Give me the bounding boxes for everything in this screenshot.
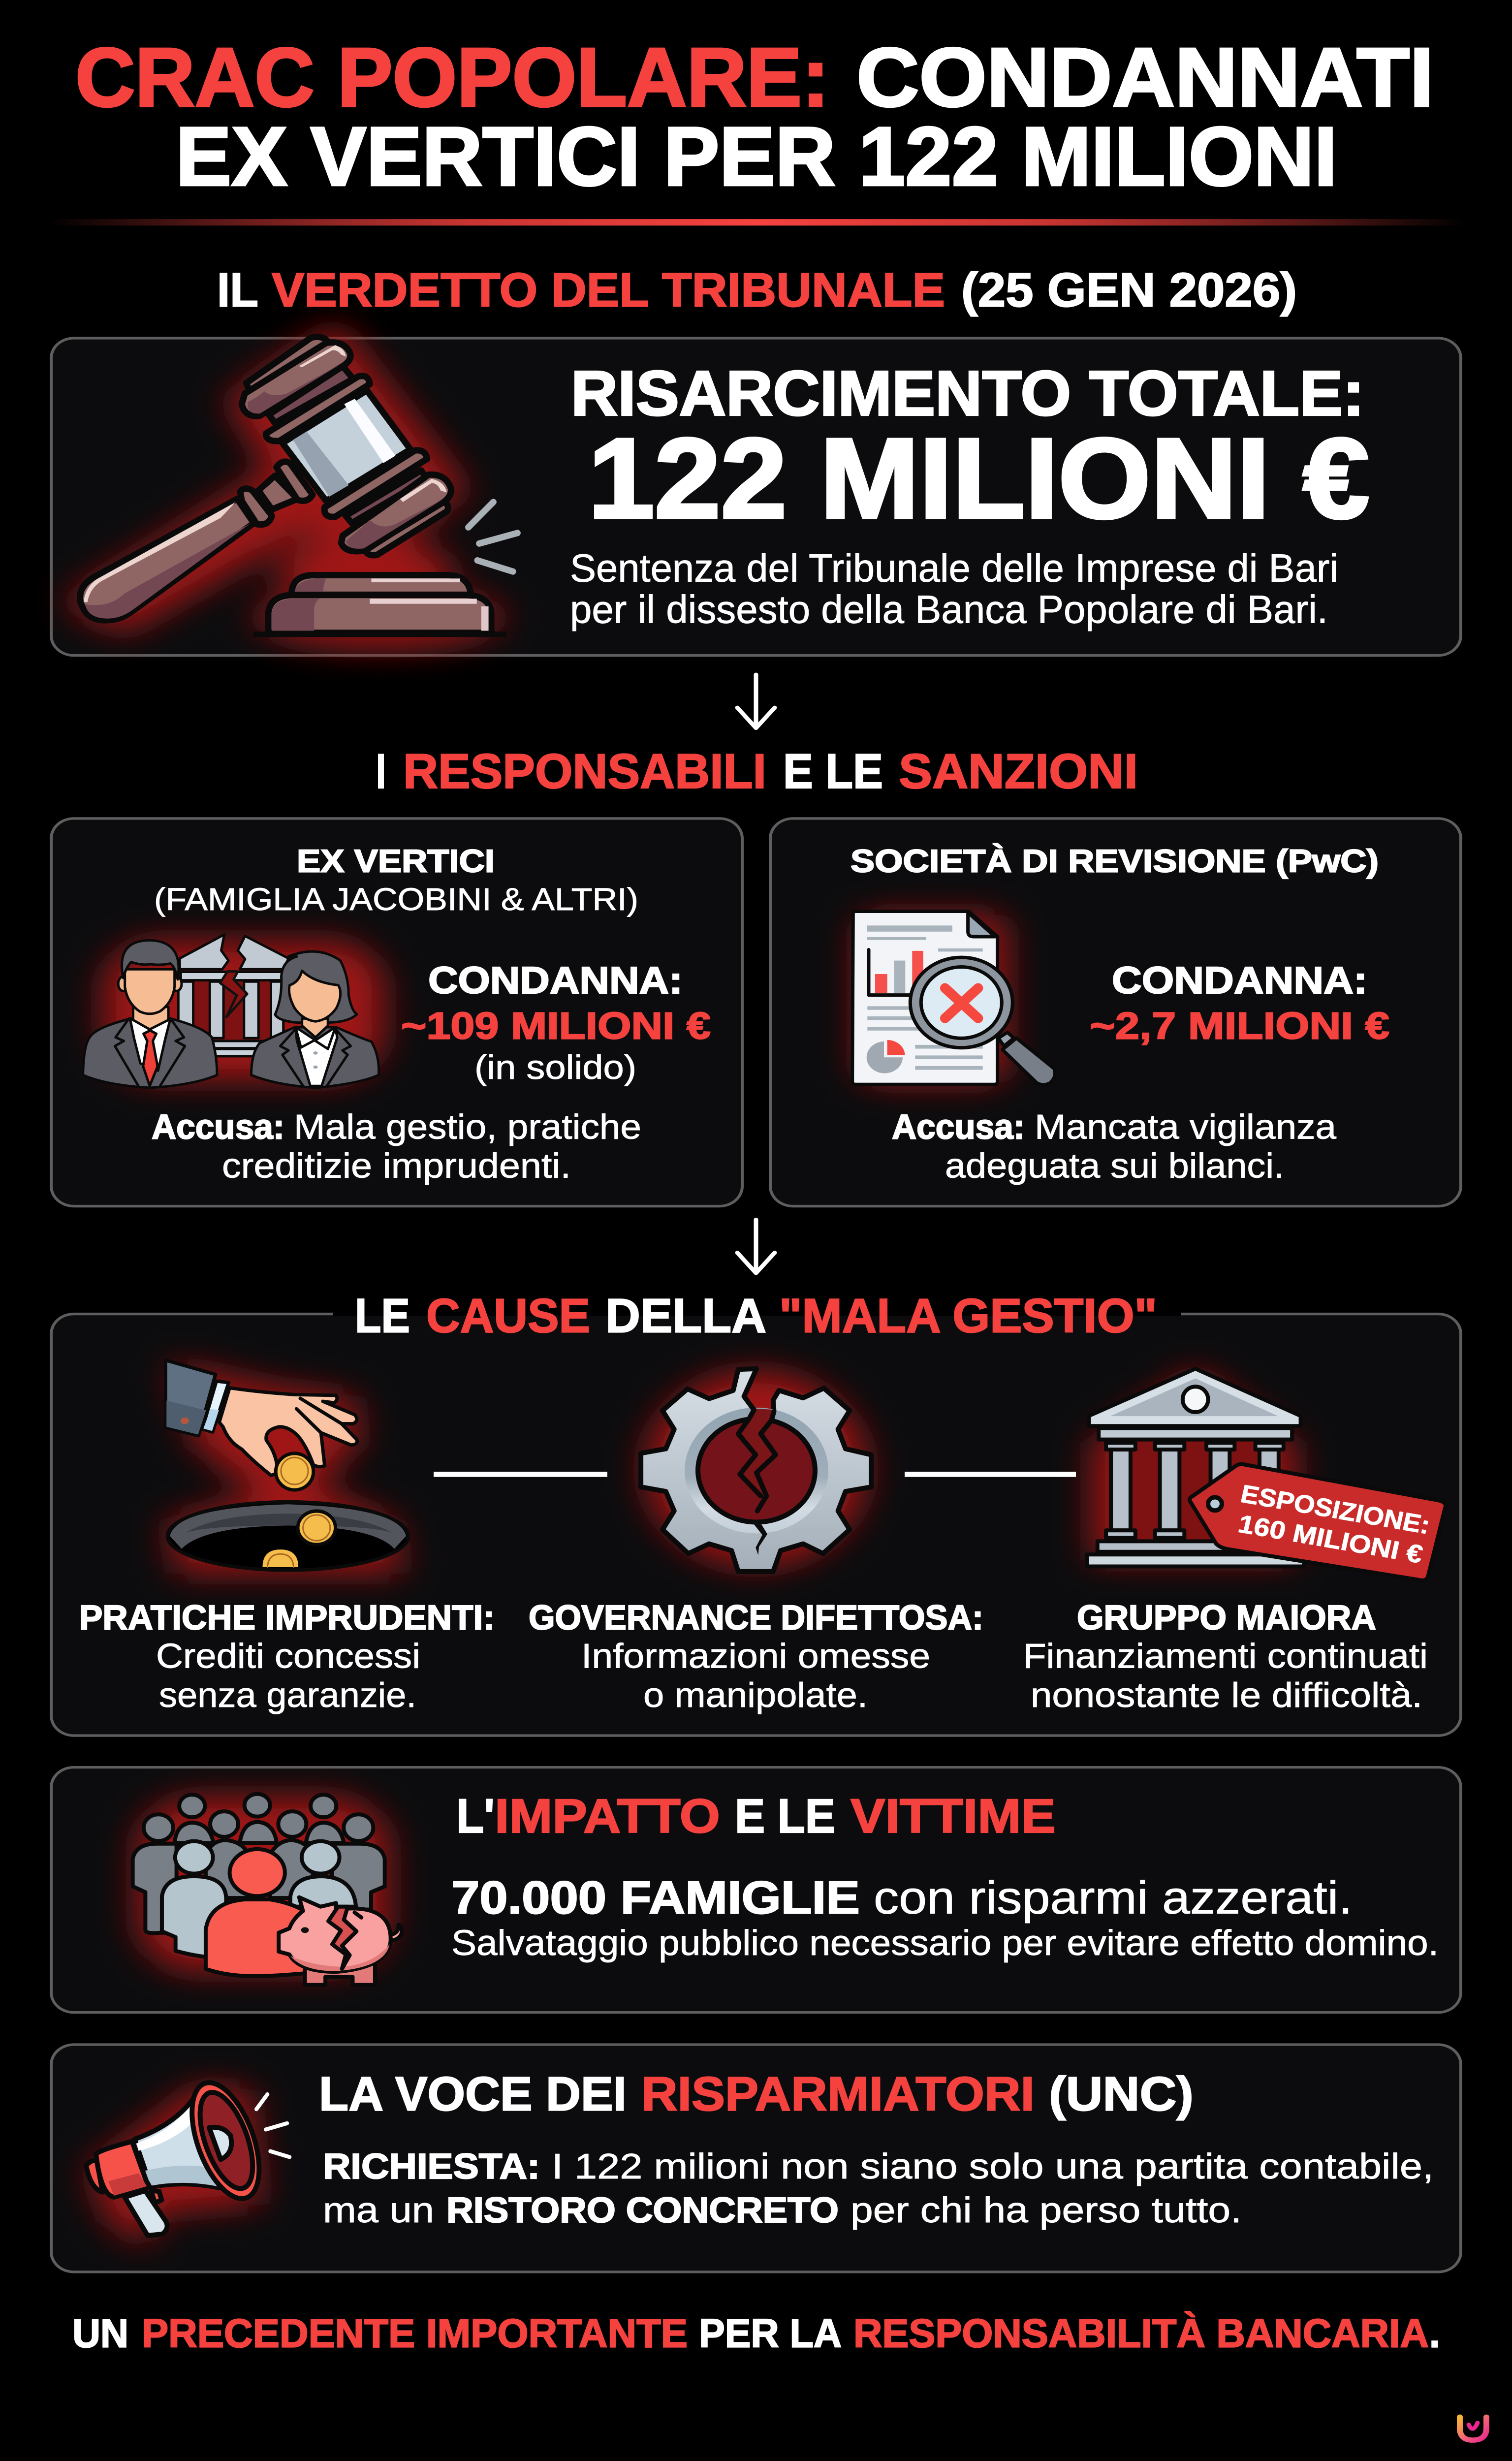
heading: le cause: CAUSE bbox=[426, 1289, 590, 1342]
connector bbox=[905, 1472, 1076, 1477]
cause: governance difettosa bbox=[529, 1598, 983, 1714]
cause: pratiche imprudenti: senza garanzie. bbox=[159, 1675, 416, 1714]
text: famiglie: Salvataggio pubblico necessario per evitare effetto domino. bbox=[451, 1924, 1439, 1963]
accusa: ex vertici: Mala gestio, pratiche bbox=[294, 1107, 641, 1146]
heading: i responsabili e le sanzioni: RESPONSABILI bbox=[403, 744, 766, 799]
icon: crowd and broken piggy bank bbox=[133, 1794, 402, 1985]
panel: impatto e vittime bbox=[51, 1767, 1461, 2013]
panel heading: ex vertici: (FAMIGLIA JACOBINI & ALTRI) bbox=[154, 883, 638, 917]
heading: impatto e vittime: L' bbox=[456, 1789, 495, 1843]
condanna: ex vertici: ~109 MILIONI € bbox=[401, 1005, 711, 1047]
condanna: societa di revisione: ~2,7 MILIONI € bbox=[1090, 1005, 1389, 1047]
title: EX VERTICI PER 122 MILIONI bbox=[176, 110, 1337, 203]
cause: governance difettosa: o manipolate. bbox=[643, 1675, 868, 1714]
footer statement: PRECEDENTE IMPORTANTE bbox=[142, 2311, 688, 2356]
text: risarcimento totale: RISARCIMENTO TOTALE: bbox=[571, 358, 1364, 429]
heading: le cause: DELLA bbox=[605, 1289, 766, 1342]
cause: gruppo maiora: Finanziamenti continuati bbox=[1023, 1637, 1428, 1675]
text: famiglie: 70.000 FAMIGLIE bbox=[451, 1872, 860, 1924]
heading: la voce dei risparmiatori bbox=[319, 2067, 1194, 2120]
heading: il verdetto del tribunale: (25 GEN 2026) bbox=[961, 263, 1297, 316]
heading: impatto e vittime: IMPATTO bbox=[495, 1789, 720, 1843]
accusa: ex vertici bbox=[152, 1107, 641, 1185]
tag text bbox=[1236, 1479, 1433, 1569]
footer statement: PER LA bbox=[699, 2311, 842, 2356]
condanna: ex vertici: CONDANNA: bbox=[428, 960, 683, 1002]
heading: le cause: "MALA GESTIO" bbox=[779, 1289, 1157, 1342]
panel heading: ex vertici: EX VERTICI bbox=[297, 843, 495, 879]
footer statement: . bbox=[1429, 2311, 1440, 2356]
text: richiesta: per chi ha perso tutto. bbox=[850, 2191, 1242, 2230]
icon: bank with exposure tag bbox=[1087, 1369, 1446, 1580]
connector bbox=[434, 1472, 607, 1477]
text: richiesta: RICHIESTA: bbox=[323, 2146, 540, 2186]
icon: executives and broken bank bbox=[83, 935, 379, 1088]
cause: pratiche imprudenti: PRATICHE IMPRUDENTI: bbox=[79, 1598, 495, 1637]
text: risarcimento totale: per il dissesto della Banca Popolare di Bari. bbox=[570, 587, 1328, 631]
footer statement: UN bbox=[72, 2311, 128, 2356]
cause: governance difettosa: Informazioni omesse bbox=[581, 1637, 930, 1675]
panel: ex vertici bbox=[51, 819, 742, 1206]
tag text: ESPOSIZIONE: bbox=[1238, 1479, 1433, 1540]
icon: hand dropping coins in a hole bbox=[165, 1360, 409, 1570]
arrow: to cause bbox=[737, 1220, 775, 1273]
logo bbox=[1460, 2417, 1486, 2440]
heading: i responsabili e le sanzioni: I bbox=[376, 744, 386, 799]
heading: impatto e vittime: VITTIME bbox=[850, 1789, 1056, 1843]
text: richiesta: ma un bbox=[323, 2191, 434, 2230]
heading: i responsabili e le sanzioni: SANZIONI bbox=[899, 744, 1138, 799]
text: richiesta: I 122 milioni non siano solo una partita contabile, bbox=[552, 2146, 1434, 2186]
panel heading: societa di revisione: SOCIETÀ DI REVISIONE (PwC) bbox=[850, 843, 1379, 879]
heading: il verdetto del tribunale bbox=[217, 263, 1297, 316]
cause: gruppo maiora: nonostante le difficoltà. bbox=[1031, 1675, 1422, 1714]
accusa: societa di revisione: Accusa: bbox=[892, 1107, 1025, 1146]
condanna: ex vertici bbox=[401, 960, 711, 1086]
tag text: 160 MILIONI € bbox=[1236, 1509, 1425, 1569]
cause: gruppo maiora: GRUPPO MAIORA bbox=[1077, 1598, 1376, 1637]
accusa: ex vertici: creditizie imprudenti. bbox=[222, 1146, 571, 1185]
cause: governance difettosa: GOVERNANCE DIFETTOSA: bbox=[529, 1598, 983, 1637]
title: CONDANNATI bbox=[856, 31, 1434, 124]
text: richiesta: RISTORO CONCRETO bbox=[446, 2191, 839, 2230]
text: risarcimento totale bbox=[570, 358, 1369, 631]
accusa: ex vertici: Accusa: bbox=[152, 1107, 284, 1146]
condanna: societa di revisione: CONDANNA: bbox=[1112, 960, 1367, 1002]
footer statement: RESPONSABILITÀ BANCARIA bbox=[853, 2311, 1429, 2356]
accusa: societa di revisione bbox=[892, 1107, 1336, 1185]
heading: la voce dei risparmiatori: (UNC) bbox=[1049, 2067, 1194, 2120]
accusa: societa di revisione: adeguata sui bilanci. bbox=[945, 1146, 1284, 1185]
icon: broken gear bbox=[641, 1369, 871, 1572]
text: risarcimento totale: 122 MILIONI € bbox=[588, 415, 1369, 542]
icon: megaphone bbox=[86, 2076, 289, 2236]
condanna: ex vertici: (in solido) bbox=[474, 1048, 636, 1086]
heading: la voce dei risparmiatori: RISPARMIATORI bbox=[641, 2067, 1035, 2120]
heading: il verdetto del tribunale: IL bbox=[217, 263, 258, 316]
heading: le cause: LE bbox=[355, 1289, 410, 1342]
panel: verdetto bbox=[51, 337, 1461, 656]
heading: il verdetto del tribunale: VERDETTO DEL TRIBUNALE bbox=[272, 263, 945, 316]
cause: pratiche imprudenti: Crediti concessi bbox=[156, 1637, 420, 1675]
panel heading: ex vertici bbox=[154, 843, 638, 917]
panel: le cause della mala gestio bbox=[51, 1289, 1461, 1735]
icon: gavel bbox=[80, 337, 517, 637]
icon: audit document with magnifier bbox=[852, 912, 1055, 1085]
cause: pratiche imprudenti bbox=[79, 1598, 495, 1714]
cause: gruppo maiora bbox=[1023, 1598, 1428, 1714]
panel: societa di revisione bbox=[770, 819, 1461, 1206]
arrow: to responsabili bbox=[737, 675, 775, 728]
heading: le cause bbox=[355, 1289, 1157, 1342]
panel: la voce dei risparmiatori bbox=[51, 2045, 1461, 2272]
text: richiesta bbox=[323, 2146, 1434, 2230]
heading: la voce dei risparmiatori: LA VOCE DEI bbox=[319, 2067, 627, 2120]
condanna: societa di revisione bbox=[1090, 960, 1389, 1047]
heading: impatto e vittime: E LE bbox=[735, 1789, 835, 1843]
text: risarcimento totale: Sentenza del Tribunale delle Imprese di Bari bbox=[570, 546, 1338, 590]
footer statement bbox=[72, 2311, 1440, 2356]
accusa: societa di revisione: Mancata vigilanza bbox=[1035, 1107, 1336, 1146]
heading: impatto e vittime bbox=[456, 1789, 1056, 1843]
heading: i responsabili e le sanzioni: E LE bbox=[783, 744, 883, 799]
heading: i responsabili e le sanzioni bbox=[376, 744, 1138, 799]
text: famiglie: con risparmi azzerati. bbox=[874, 1872, 1353, 1924]
title bbox=[75, 31, 1434, 203]
title: CRAC POPOLARE: bbox=[75, 31, 829, 124]
text: famiglie bbox=[451, 1872, 1439, 1963]
